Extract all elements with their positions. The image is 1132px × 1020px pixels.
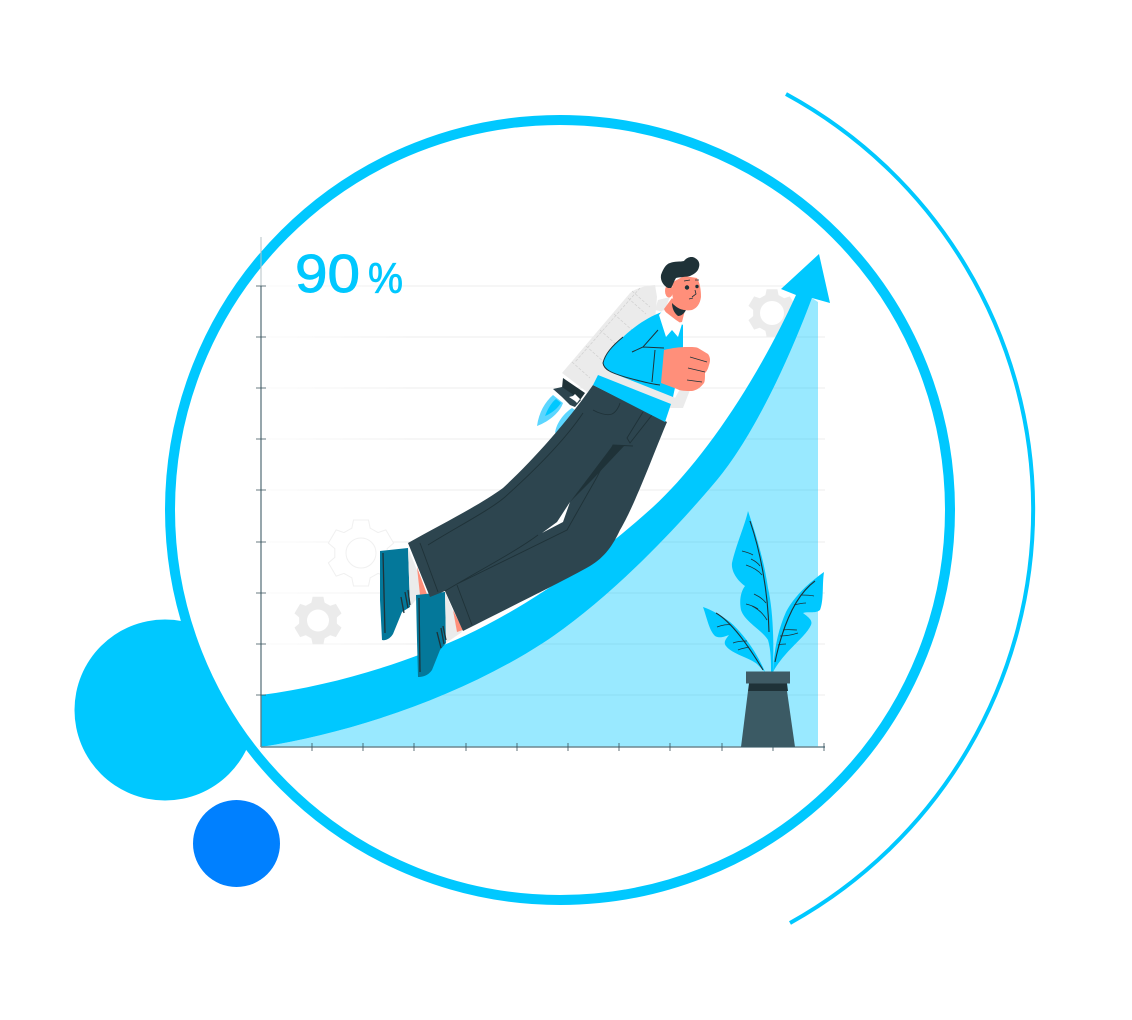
small blue circle [193,800,280,887]
main ring [170,120,950,900]
sweater hem [593,375,671,422]
back ankle [417,567,428,597]
leaf veins [716,521,815,670]
area under growth curve [261,298,818,747]
face details [684,280,699,299]
trouser crease shadow [570,445,625,502]
shoe: front [416,592,446,677]
arm outline [603,330,664,385]
collar [659,310,682,337]
trouser seams [420,403,652,625]
jetpack flames [537,395,578,433]
rising arrow [261,254,830,747]
front ankle [453,610,463,632]
beard [672,303,686,316]
shoe: back [380,548,410,640]
trousers [408,385,667,631]
chart axes [256,237,825,751]
hair [661,257,699,288]
head [672,276,701,310]
percentage label [295,244,403,304]
neck [664,298,685,324]
front sock [445,592,462,643]
gear icon: outlined [328,520,394,586]
potted plant [703,511,824,747]
sweater body [610,312,683,397]
hand [661,347,710,391]
finger lines [687,357,707,382]
arm [603,312,668,385]
ear [665,284,673,298]
character with jetpack [380,257,710,677]
shoe laces [383,553,446,672]
gear icon: lower left [294,597,342,644]
gap between legs [542,502,570,533]
strap frame [596,370,690,408]
outer right arc [786,94,1033,923]
jetpack nozzle [553,378,585,407]
plant pot [741,672,795,747]
jetpack body [562,285,670,392]
gear icon: upper right [748,289,796,337]
percentage label: 90 [295,244,360,304]
growth chart [256,237,830,751]
back sock [408,548,428,607]
plant leaves [703,511,824,672]
percentage label: % [368,255,403,303]
large cyan circle [74,620,256,800]
